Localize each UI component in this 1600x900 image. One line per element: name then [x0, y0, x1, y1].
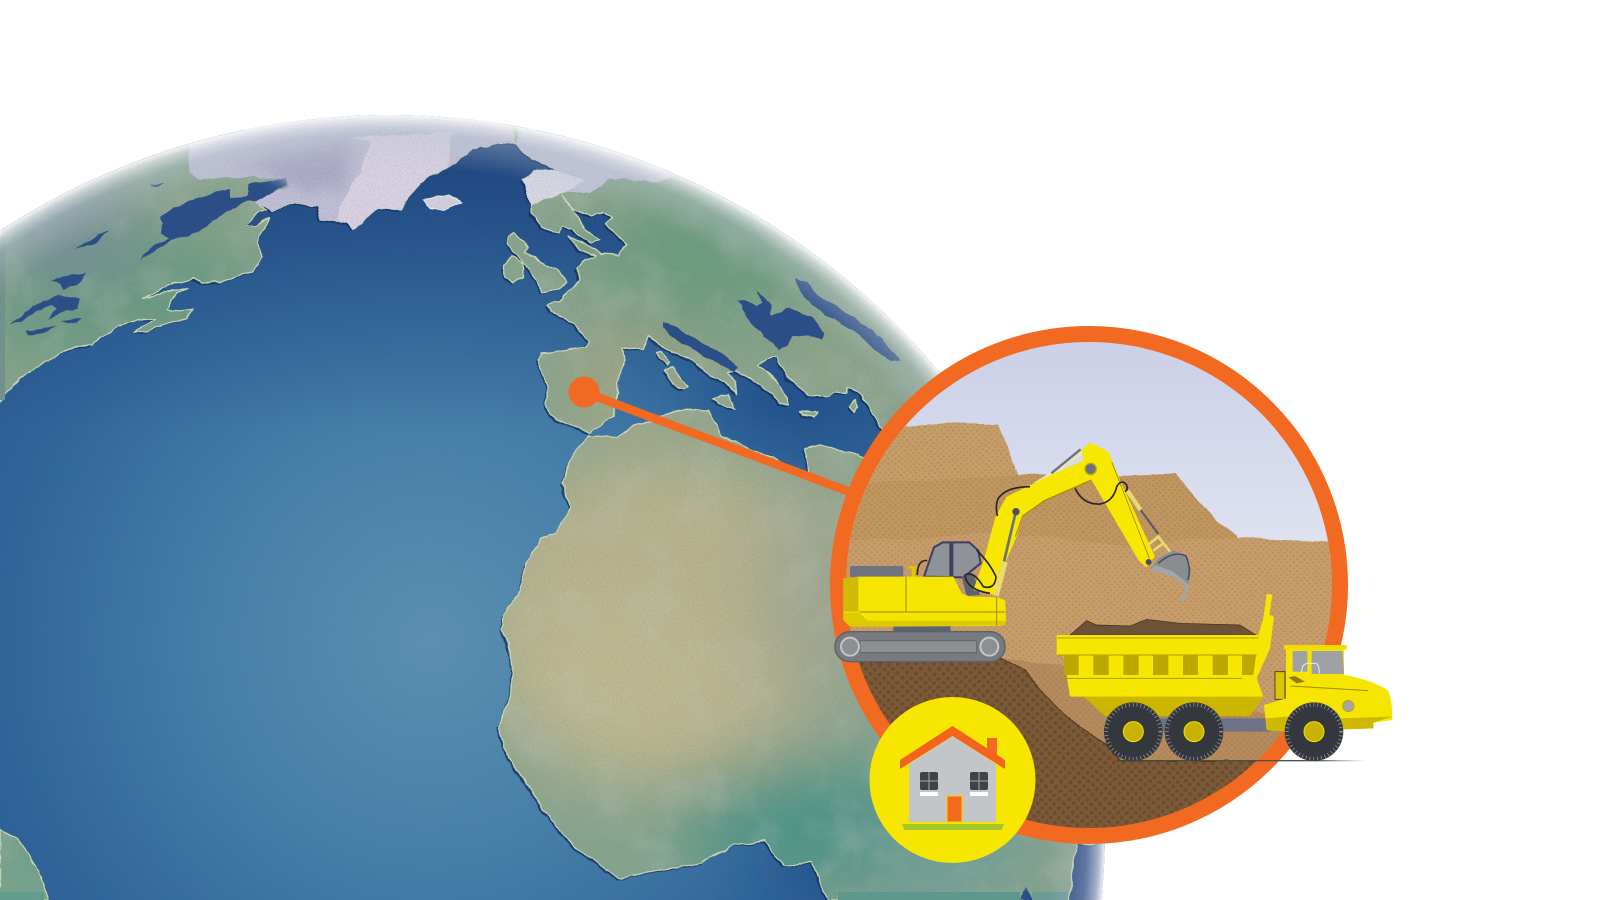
sky [840, 340, 1340, 560]
left window [920, 772, 938, 796]
excavator [835, 443, 1191, 662]
back hill [868, 422, 1018, 484]
bucket linkage [1127, 491, 1170, 552]
continents [0, 100, 1120, 900]
upper body [843, 577, 1006, 627]
middle hill [850, 473, 1238, 546]
ocean [0, 115, 1105, 900]
Greenland ice sheet [337, 132, 451, 230]
bucket [1150, 551, 1191, 602]
Svalbard ice blob [522, 171, 585, 203]
inset scene [840, 340, 1340, 840]
lower tan bank [1002, 659, 1300, 761]
darker ice patches [253, 144, 352, 194]
chassis [1160, 718, 1270, 732]
boom [973, 448, 1097, 595]
load of earth [1070, 619, 1256, 635]
paper grain [0, 100, 1120, 900]
locator line [584, 392, 850, 492]
house badge [870, 697, 1036, 863]
globe [0, 100, 1120, 900]
land colours [0, 100, 1120, 900]
dark seas shading [700, 355, 1100, 900]
terrain [840, 423, 1340, 840]
walls [909, 736, 996, 822]
arctic ice, North America side [188, 115, 515, 228]
front wheel [1285, 702, 1343, 761]
Iceland [423, 195, 462, 210]
crawler track [835, 626, 1005, 662]
arm [1082, 443, 1155, 567]
ground shadow [1117, 760, 1367, 761]
rear wheel 2 [1165, 702, 1223, 761]
hydraulic hoses [917, 482, 1127, 593]
inland waters [9, 178, 1032, 900]
brown pit [858, 658, 1256, 828]
dump body [1057, 594, 1274, 716]
roof [900, 726, 1005, 769]
chimney [987, 738, 997, 758]
dark northern ocean shading [0, 130, 921, 368]
cab and bonnet [1264, 645, 1392, 732]
frame-edge land strips [0, 236, 1068, 900]
land coast highlight [0, 100, 1100, 900]
rear wheel 1 [1104, 702, 1163, 761]
front hill [846, 532, 1332, 728]
yellow disc [870, 697, 1036, 863]
counterweight and exhaust [850, 566, 919, 577]
cab [924, 542, 981, 596]
locator dot [568, 376, 600, 408]
land shadow [0, 100, 1100, 900]
boom cylinder [996, 508, 1020, 596]
right window [970, 772, 988, 796]
dump truck [1057, 594, 1392, 761]
articulation and ladder [1275, 672, 1285, 699]
Eurasian arctic ice [516, 128, 672, 193]
door [947, 796, 962, 822]
grass strip [902, 824, 1004, 830]
inset ring [838, 334, 1340, 836]
rim fade [0, 115, 1105, 900]
